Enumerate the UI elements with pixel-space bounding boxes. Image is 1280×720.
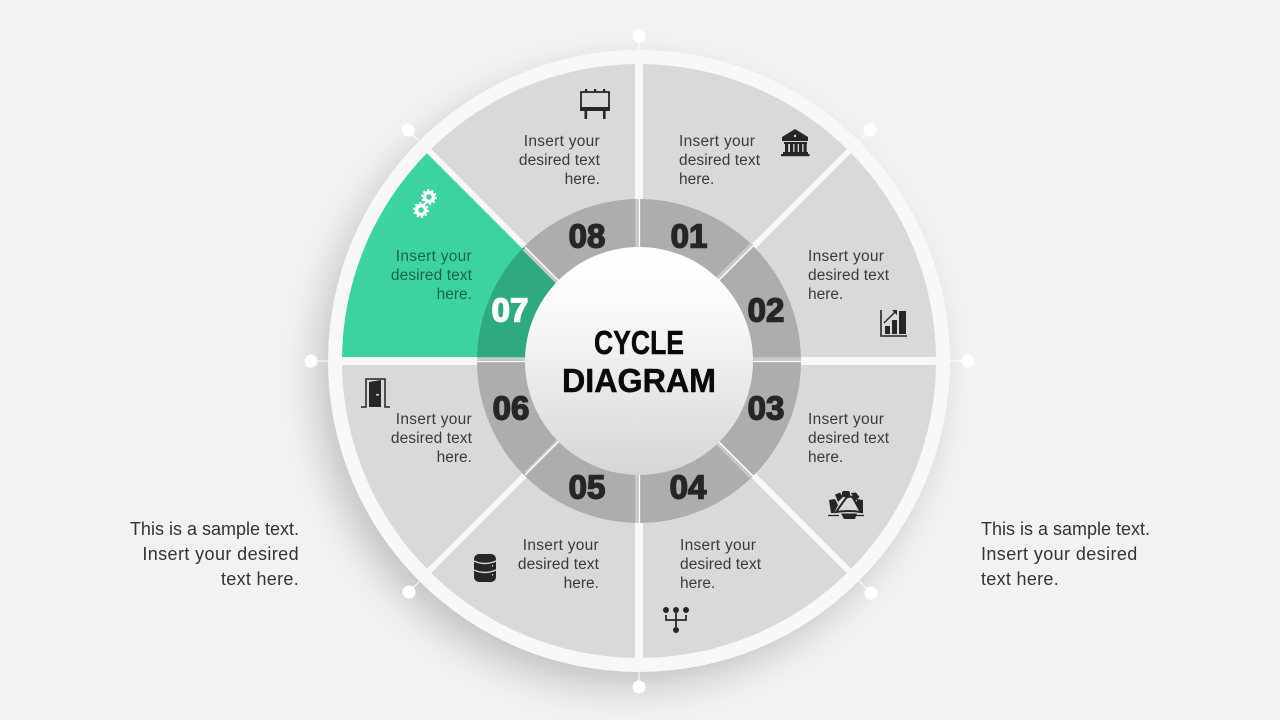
segment 04 [639,361,849,658]
segment 03: Insert your [808,411,884,428]
segment 06: here. [437,449,472,466]
segment 07 highlighted: here. [437,286,472,303]
title [562,324,716,399]
segment 05: 05 [569,468,605,506]
segment 04: desired text [680,556,762,573]
left sample text: text here. [221,569,299,589]
segment 08: desired text [519,152,601,169]
segment 08: 08 [569,218,605,254]
segment 01: here. [679,171,714,188]
segment 02 [639,151,936,361]
segment 08 [429,64,639,361]
segment 04: here. [680,575,715,592]
segment 06: Insert your [396,411,472,428]
centre hub [525,247,753,475]
segment 05: Insert your [523,537,599,554]
outer ring [328,50,950,672]
segment 05: desired text [518,556,600,573]
icon: bank [781,129,810,156]
icon: growth chart [881,310,907,336]
icon: hierarchy tree [663,607,689,633]
segment 02: 02 [748,292,784,328]
segment 04: Insert your [680,537,756,554]
segment 06 [342,361,639,571]
segment 07 highlighted: desired text [391,267,473,284]
icon: database [474,554,496,582]
wheel drop shadow [318,70,934,686]
segment 03: 03 [748,390,784,426]
segment 07 highlighted [342,151,639,361]
connector lines and dots [304,30,974,694]
segment 03 [639,361,936,571]
right sample text: text here. [981,569,1059,589]
segment 08: here. [565,171,600,188]
segment 02: Insert your [808,248,884,265]
segment 07 highlighted: Insert your [396,248,472,265]
segment 07 highlighted: 07 [492,292,528,328]
segment 05 [429,361,639,658]
segment 06: desired text [391,430,473,447]
segment separators [338,60,940,662]
segment 01: 01 [671,218,707,254]
icon: door [361,379,390,407]
segment 03: desired text [808,430,890,447]
segment 05: here. [564,575,599,592]
icon: meeting table [828,491,864,519]
right sample text: Insert your desired [981,544,1138,564]
left sample text: This is a sample text. [130,519,299,539]
segment 08: Insert your [524,133,600,150]
segment 02: desired text [808,267,890,284]
right sample text: This is a sample text. [981,519,1150,539]
left sample text: Insert your desired [142,544,299,564]
segment 01 [639,64,849,361]
icon: gears [414,190,436,217]
segment 01: Insert your [679,133,755,150]
segment 06: 06 [493,390,529,426]
segment 01: desired text [679,152,761,169]
icon: billboard [580,89,610,119]
segment 02: here. [808,286,843,303]
title: DIAGRAM [562,362,716,399]
segment 04: 04 [670,468,707,506]
title: CYCLE [594,324,684,361]
segment 03: here. [808,449,843,466]
